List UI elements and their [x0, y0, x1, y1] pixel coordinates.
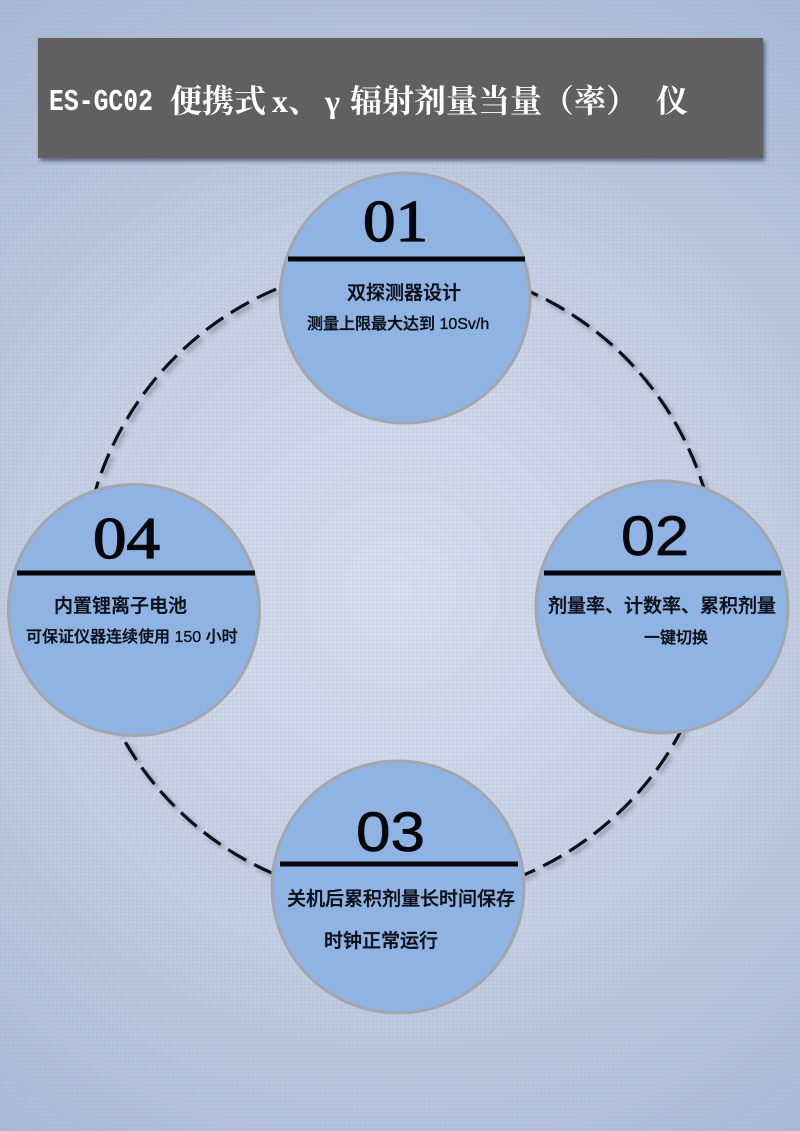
- divider 02: [544, 570, 781, 576]
- title text: 仪: [656, 83, 688, 119]
- title text: （率）: [542, 83, 638, 119]
- panel: 01 dual detector: [280, 173, 530, 423]
- divider 04: [17, 570, 255, 576]
- title text: [49, 83, 688, 120]
- title text: x、: [272, 83, 320, 119]
- heading 03: 关机后累积剂量长时间保存: [287, 888, 515, 910]
- description 01: 测量上限最大达到 10Sv/h: [307, 315, 489, 333]
- title text: γ: [324, 83, 340, 119]
- number 01: 01: [363, 188, 428, 254]
- heading 02: 剂量率、计数率、累积剂量: [548, 595, 776, 617]
- description 02: 一键切换: [644, 629, 708, 647]
- panel: 03 data retention: [272, 761, 524, 1013]
- number 02: 02: [621, 504, 689, 567]
- title text: 辐射剂量当量: [350, 83, 542, 119]
- heading 04: 内置锂离子电池: [54, 595, 187, 617]
- number 04: 04: [93, 505, 160, 571]
- description 03: 时钟正常运行: [324, 930, 438, 952]
- panel: 02 one-key switch: [536, 481, 788, 733]
- title text: 便携式: [170, 83, 266, 119]
- divider 03: [280, 862, 518, 866]
- divider 01: [288, 256, 525, 262]
- heading 01: 双探测器设计: [347, 282, 461, 304]
- title text: ES-GC02: [49, 85, 153, 120]
- description 04: 可保证仪器连续使用 150 小时: [26, 628, 238, 646]
- number 03: 03: [356, 800, 425, 863]
- panel: 04 battery: [8, 484, 260, 736]
- title banner: [38, 38, 763, 158]
- dashed ring connector: [82, 264, 718, 900]
